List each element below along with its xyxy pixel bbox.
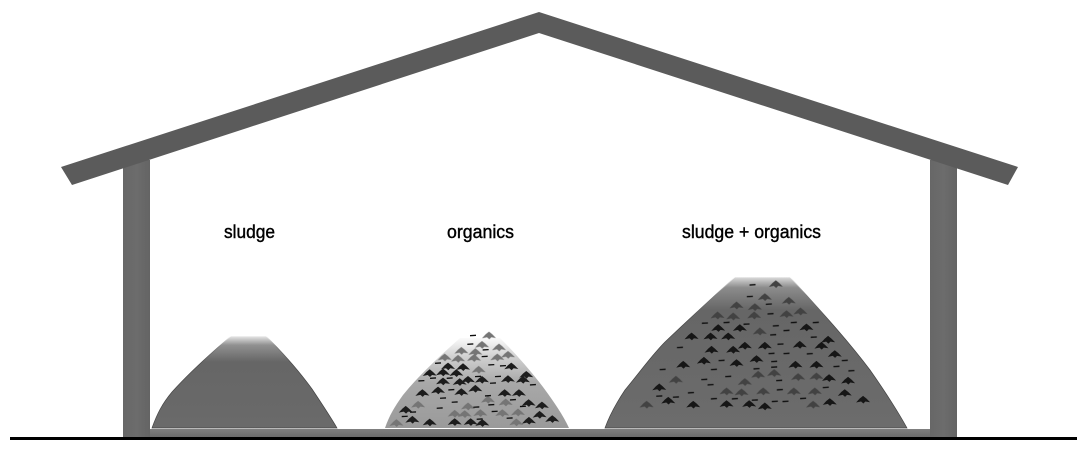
organics small dashes [402, 335, 536, 420]
label: organics: organics [447, 222, 514, 242]
pile: sludge [152, 336, 337, 428]
floor slab [150, 429, 930, 437]
right pillar [930, 160, 957, 437]
pile: organics [385, 332, 569, 428]
organics grey fragments [389, 332, 525, 427]
label: sludge: sludge [224, 222, 275, 242]
mixed pile small dashes [656, 284, 854, 402]
organics dark fragments [399, 363, 559, 427]
ground line [10, 437, 1077, 440]
pile: sludge + organics [605, 277, 907, 428]
label: sludge + organics: sludge + organics [682, 222, 821, 242]
mixed pile dark fragments [652, 324, 870, 410]
left pillar [123, 160, 150, 437]
mixed pile grey fragments [640, 280, 823, 409]
roof [61, 12, 1018, 185]
